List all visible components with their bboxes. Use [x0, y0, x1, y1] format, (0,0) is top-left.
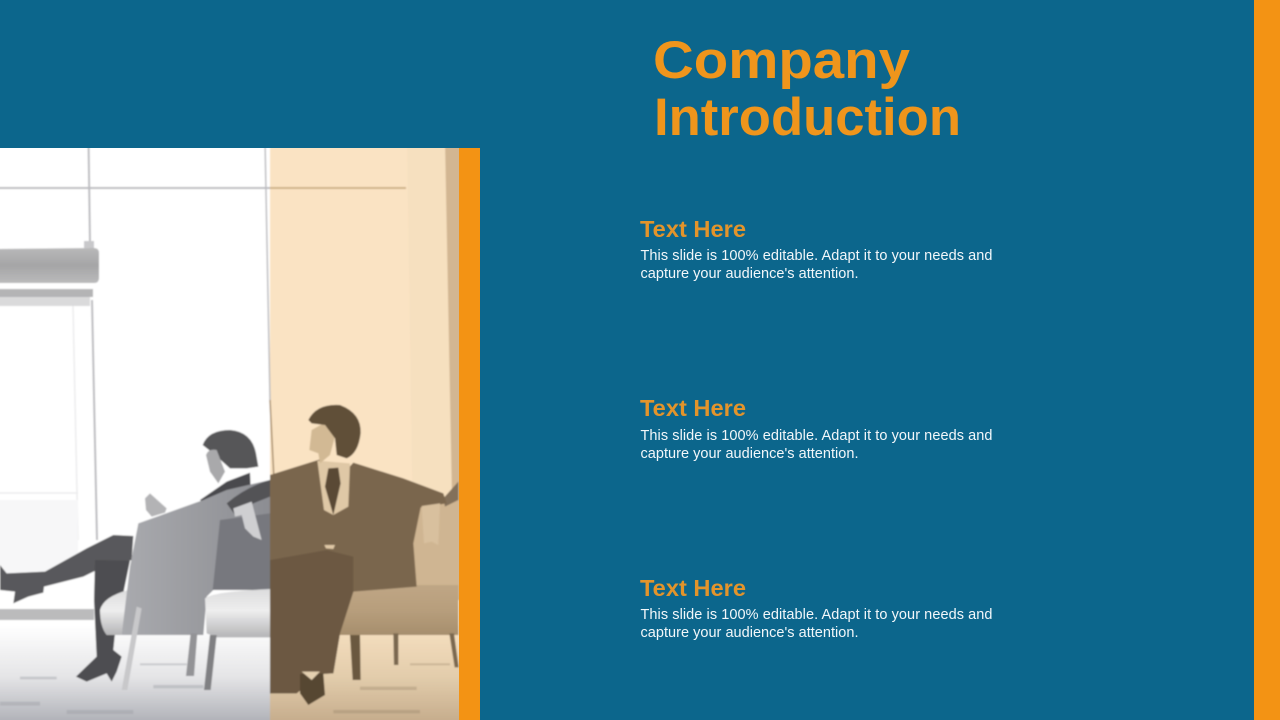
title: Company — [653, 31, 910, 90]
title — [653, 31, 961, 147]
title: Introduction — [654, 88, 961, 147]
right accent bar — [1254, 0, 1280, 720]
text block 3: capture your audience's attention. — [640, 625, 858, 641]
text block 3: Text Here — [640, 575, 746, 601]
woman: left figure — [0, 430, 258, 682]
text block 3: This slide is 100% editable. Adapt it to your needs and — [640, 607, 992, 623]
text block 1: capture your audience's attention. — [640, 266, 858, 282]
text block 2: Text Here — [640, 395, 746, 421]
photo accent bar — [459, 148, 480, 720]
chair: right duotone half — [339, 482, 459, 681]
photo: two women on chairs with duotone split — [0, 140, 470, 720]
woman: right figure — [270, 405, 447, 705]
text block 1: Text Here — [640, 216, 746, 242]
text block 3 — [640, 575, 992, 641]
text block 1 — [640, 216, 992, 282]
text block 2: capture your audience's attention. — [640, 446, 858, 462]
text block 2: This slide is 100% editable. Adapt it to your needs and — [640, 428, 992, 444]
text block 2 — [640, 395, 992, 462]
text block 1: This slide is 100% editable. Adapt it to your needs and — [640, 248, 992, 264]
chairs: left duotone half — [100, 480, 270, 690]
